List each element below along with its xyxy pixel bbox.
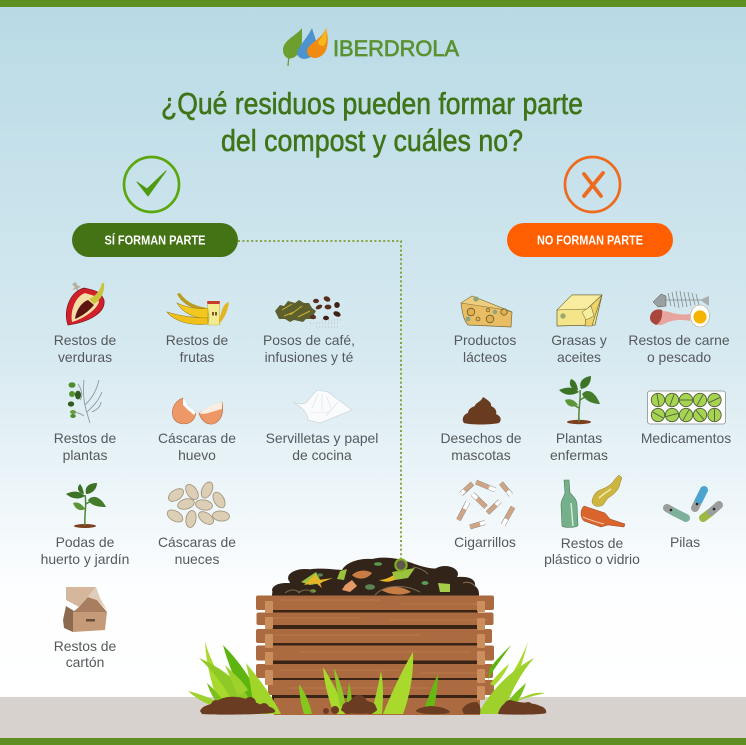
grass: right <box>478 642 545 714</box>
item: productos lacteos: lácteos <box>463 349 507 365</box>
item: grasas y aceites <box>551 295 607 365</box>
item: podas de huerto y jardin <box>41 483 129 567</box>
item: cascaras de nueces <box>158 480 236 567</box>
item: pilas: Pilas <box>670 534 700 550</box>
item: restos de frutas <box>166 293 229 365</box>
pill: no forman parte <box>507 223 673 257</box>
item: restos de plantas <box>54 380 117 463</box>
ground <box>0 697 746 738</box>
item: cigarrillos <box>454 482 516 550</box>
item: cascaras de nueces: Cáscaras de <box>158 534 236 550</box>
item: restos de carne o pescado: Restos de carne <box>628 332 730 348</box>
item: restos de plantas: plantas <box>63 447 107 463</box>
compost bin <box>256 558 494 715</box>
item: grasas y aceites: Grasas y <box>551 332 607 348</box>
grass: left <box>188 642 281 714</box>
item: cascaras de huevo <box>158 398 236 463</box>
item: restos de verduras: Restos de <box>54 332 117 348</box>
title <box>161 86 583 158</box>
item: cascaras de huevo: huevo <box>178 447 216 463</box>
item: plantas enfermas: Plantas <box>556 430 602 446</box>
item: posos de cafe, infusiones y te <box>263 295 355 365</box>
logo <box>283 28 459 66</box>
item: restos de carne o pescado: o pescado <box>647 349 711 365</box>
item: servilletas y papel de cocina: de cocina <box>292 447 352 463</box>
item: restos de frutas: frutas <box>180 349 214 365</box>
item: restos de verduras: verduras <box>58 349 112 365</box>
posts <box>265 601 485 700</box>
item: posos de cafe, infusiones y te: infusiones y té <box>265 349 354 365</box>
item: medicamentos <box>641 391 731 446</box>
pill: no forman parte: NO FORMAN PARTE <box>537 232 643 248</box>
item: podas de huerto y jardin: huerto y jardín <box>41 551 129 567</box>
bottom bar <box>0 738 746 745</box>
pill: si forman parte <box>72 223 238 257</box>
item: cascaras de nueces: nueces <box>175 551 219 567</box>
item: restos de plastico o vidrio <box>544 475 640 567</box>
item: restos de carton <box>54 587 117 670</box>
item: restos de carne o pescado <box>628 291 730 365</box>
icon: check mark <box>124 157 179 212</box>
item: grasas y aceites: aceites <box>557 349 601 365</box>
item: cigarrillos: Cigarrillos <box>454 534 516 550</box>
item: productos lacteos <box>454 296 516 365</box>
item: plantas enfermas: enfermas <box>550 447 608 463</box>
item: desechos de mascotas: mascotas <box>451 447 511 463</box>
connector: dotted line to compost <box>238 241 401 560</box>
wood back <box>272 600 478 710</box>
grass: middle <box>299 652 438 714</box>
item: restos de plastico o vidrio: plástico o vidrio <box>544 551 640 567</box>
title: ¿Qué residuos pueden formar parte <box>161 86 583 121</box>
icon: cross mark <box>565 157 620 212</box>
compost pile <box>272 558 479 597</box>
ring marker <box>395 559 407 571</box>
item: productos lacteos: Productos <box>454 332 516 348</box>
pill: si forman parte: SÍ FORMAN PARTE <box>104 232 206 248</box>
item: restos de plantas: Restos de <box>54 430 117 446</box>
planks <box>256 596 494 715</box>
item: servilletas y papel de cocina <box>266 390 378 463</box>
item: medicamentos: Medicamentos <box>641 430 731 446</box>
item: posos de cafe, infusiones y te: Posos de café, <box>263 332 355 348</box>
item: plantas enfermas <box>550 376 608 463</box>
item: desechos de mascotas <box>440 397 522 463</box>
item: restos de carton: Restos de <box>54 638 117 654</box>
item: cascaras de huevo: Cáscaras de <box>158 430 236 446</box>
logo: IBERDROLA <box>333 36 459 61</box>
soil mounds <box>200 695 546 715</box>
item: restos de frutas: Restos de <box>166 332 229 348</box>
item: pilas <box>667 490 719 550</box>
item: desechos de mascotas: Desechos de <box>440 430 522 446</box>
item: servilletas y papel de cocina: Servilletas y papel <box>266 430 378 446</box>
item: restos de carton: cartón <box>66 654 104 670</box>
title: del compost y cuáles no? <box>221 123 523 158</box>
item: restos de verduras <box>54 282 117 365</box>
item: restos de plastico o vidrio: Restos de <box>561 535 624 551</box>
top bar <box>0 0 746 7</box>
item: podas de huerto y jardin: Podas de <box>56 534 115 550</box>
